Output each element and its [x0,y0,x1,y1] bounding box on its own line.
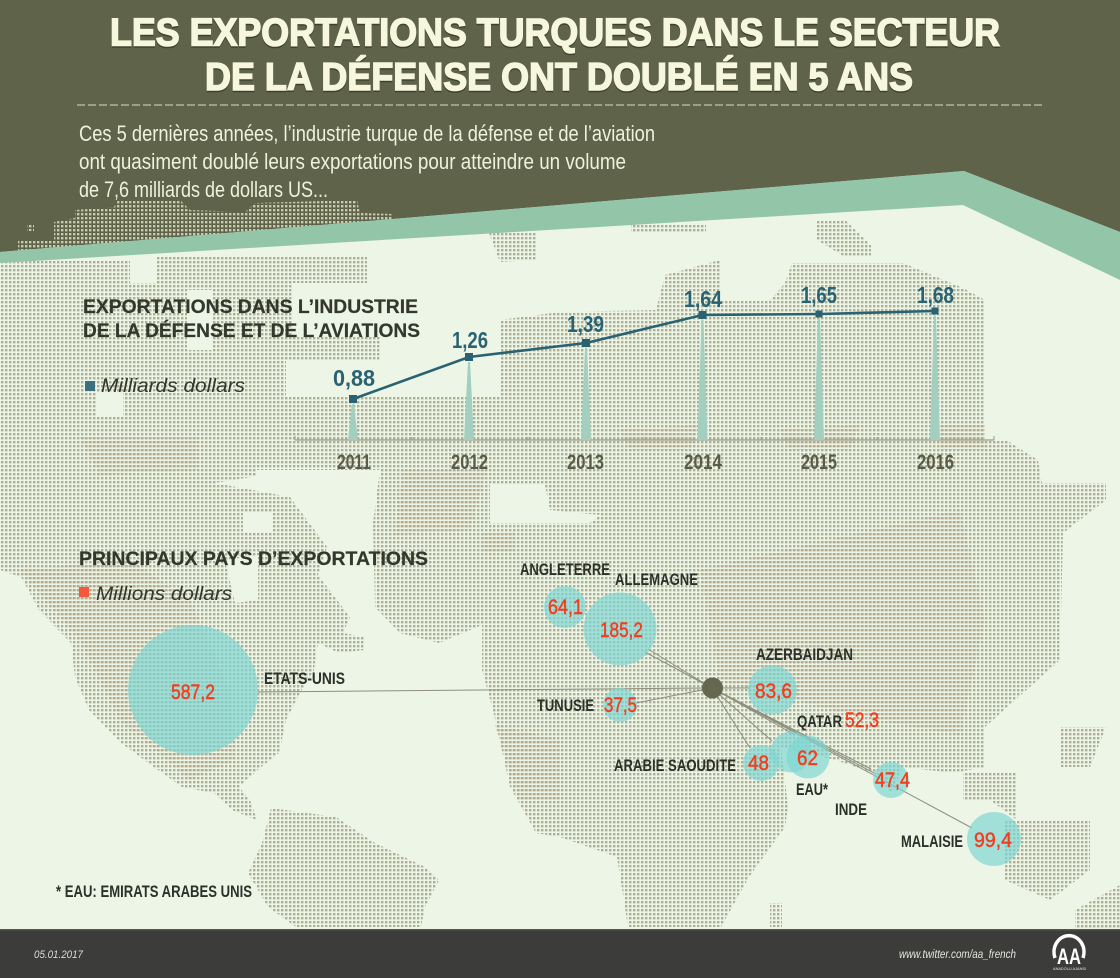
data values: 1,68 [917,282,954,308]
world dot map [0,220,1120,930]
year labels: 2011 [337,451,371,474]
data values: 1,65 [801,282,837,308]
bubble: Allemagne [584,571,698,666]
data line [353,311,935,399]
bubble: Qatar: 52,3 [845,708,879,732]
green band [0,171,1120,280]
bubble: Azerbaidjan: AZERBAIDJAN [756,646,853,664]
axis [295,436,994,440]
footnote: * EAU: EMIRATS ARABES UNIS [56,883,252,901]
bubble: Azerbaidjan: 83,6 [755,679,792,703]
data values: 0,88 [333,365,375,391]
bubble: Tunisie: 37,5 [604,693,637,717]
bubble: Allemagne: ALLEMAGNE [615,571,698,589]
bubble: Angleterre: 64,1 [548,595,583,619]
bubble: Malaisie: MALAISIE [901,833,963,851]
chart heading: EXPORTATIONS DANS L’INDUSTRIE [83,297,418,318]
footer [0,929,1120,978]
bubble: Malaisie [901,812,1021,866]
bubble: Inde: INDE [835,801,867,819]
export legend: Millions dollars [96,584,233,605]
bubble: Angleterre [520,561,610,628]
year labels: 2015 [801,451,837,474]
bubble: Tunisie: TUNUSIE [537,697,594,715]
bubble: Inde: 47,4 [875,768,910,792]
date: 05.01.2017 [34,949,84,961]
icon: Anadolu Agency logo: AA [1057,944,1081,969]
connector lines from Turkey [258,649,972,828]
year labels [337,451,954,474]
header panel [0,0,1120,252]
title: LES EXPORTATIONS TURQUES DANS LE SECTEUR [110,13,1000,56]
year labels: 2013 [567,451,604,474]
spikes [348,316,940,440]
data markers [349,308,938,403]
bubble: Qatar [770,708,879,772]
bubble: Qatar: QATAR [797,713,842,731]
title: DE LA DÉFENSE ONT DOUBLÉ EN 5 ANS [205,56,913,100]
bubble: Inde [835,762,910,819]
bubble: Arabie Saoudite: 48 [748,751,769,775]
intro text [79,121,655,202]
bubble: Etats-Unis: 587,2 [171,680,215,704]
chart heading: DE LA DÉFENSE ET DE L’AVIATIONS [83,320,420,342]
line chart: exports 2011-2016 [295,282,994,474]
intro text: de 7,6 milliards de dollars US... [79,177,328,202]
bubble: EAU [786,736,830,799]
export countries heading: PRINCIPAUX PAYS D’EXPORTATIONS [79,549,428,570]
data values: 1,64 [684,286,722,312]
chart heading [83,297,420,342]
header dotted map fragment [18,201,392,250]
data values [333,282,954,391]
year labels: 2016 [917,451,954,474]
intro text: Ces 5 dernières années, l’industrie turque de la défense et de l’aviation [79,121,655,146]
bubble: EAU: 62 [797,746,818,770]
icon: Anadolu Agency logo: ANADOLU AJANSI [1053,966,1086,971]
hub: Turquie [702,678,723,698]
bubble: Angleterre: ANGLETERRE [520,561,610,579]
year labels: 2012 [451,451,488,474]
intro text: ont quasiment doublé leurs exportations pour atteindre un volume [79,149,626,174]
bubble: Etats-Unis: ETATS-UNIS [264,670,345,688]
bubble: Etats-Unis [128,625,345,755]
bubble: Arabie Saoudite: ARABIE SAOUDITE [614,757,736,775]
bubble: Allemagne: 185,2 [600,618,643,642]
bubble: Azerbaidjan [748,646,853,714]
bubble: Tunisie [537,688,637,722]
chart legend: Milliards dollars [101,376,246,397]
title: DE LA DÉFENSE ONT DOUBLÉ EN 5 ANS [205,55,913,99]
bubble: EAU: EAU* [796,781,828,799]
data values: 1,39 [567,311,604,337]
title [110,12,1000,100]
bubble: Arabie Saoudite [614,745,779,781]
data values: 1,26 [452,327,488,353]
bubble: Malaisie: 99,4 [974,828,1012,852]
source url: www.twitter.com/aa_french [899,949,1016,961]
title: LES EXPORTATIONS TURQUES DANS LE SECTEUR [110,12,1000,54]
icon: Anadolu Agency logo [1053,936,1086,971]
year labels: 2014 [684,451,722,474]
